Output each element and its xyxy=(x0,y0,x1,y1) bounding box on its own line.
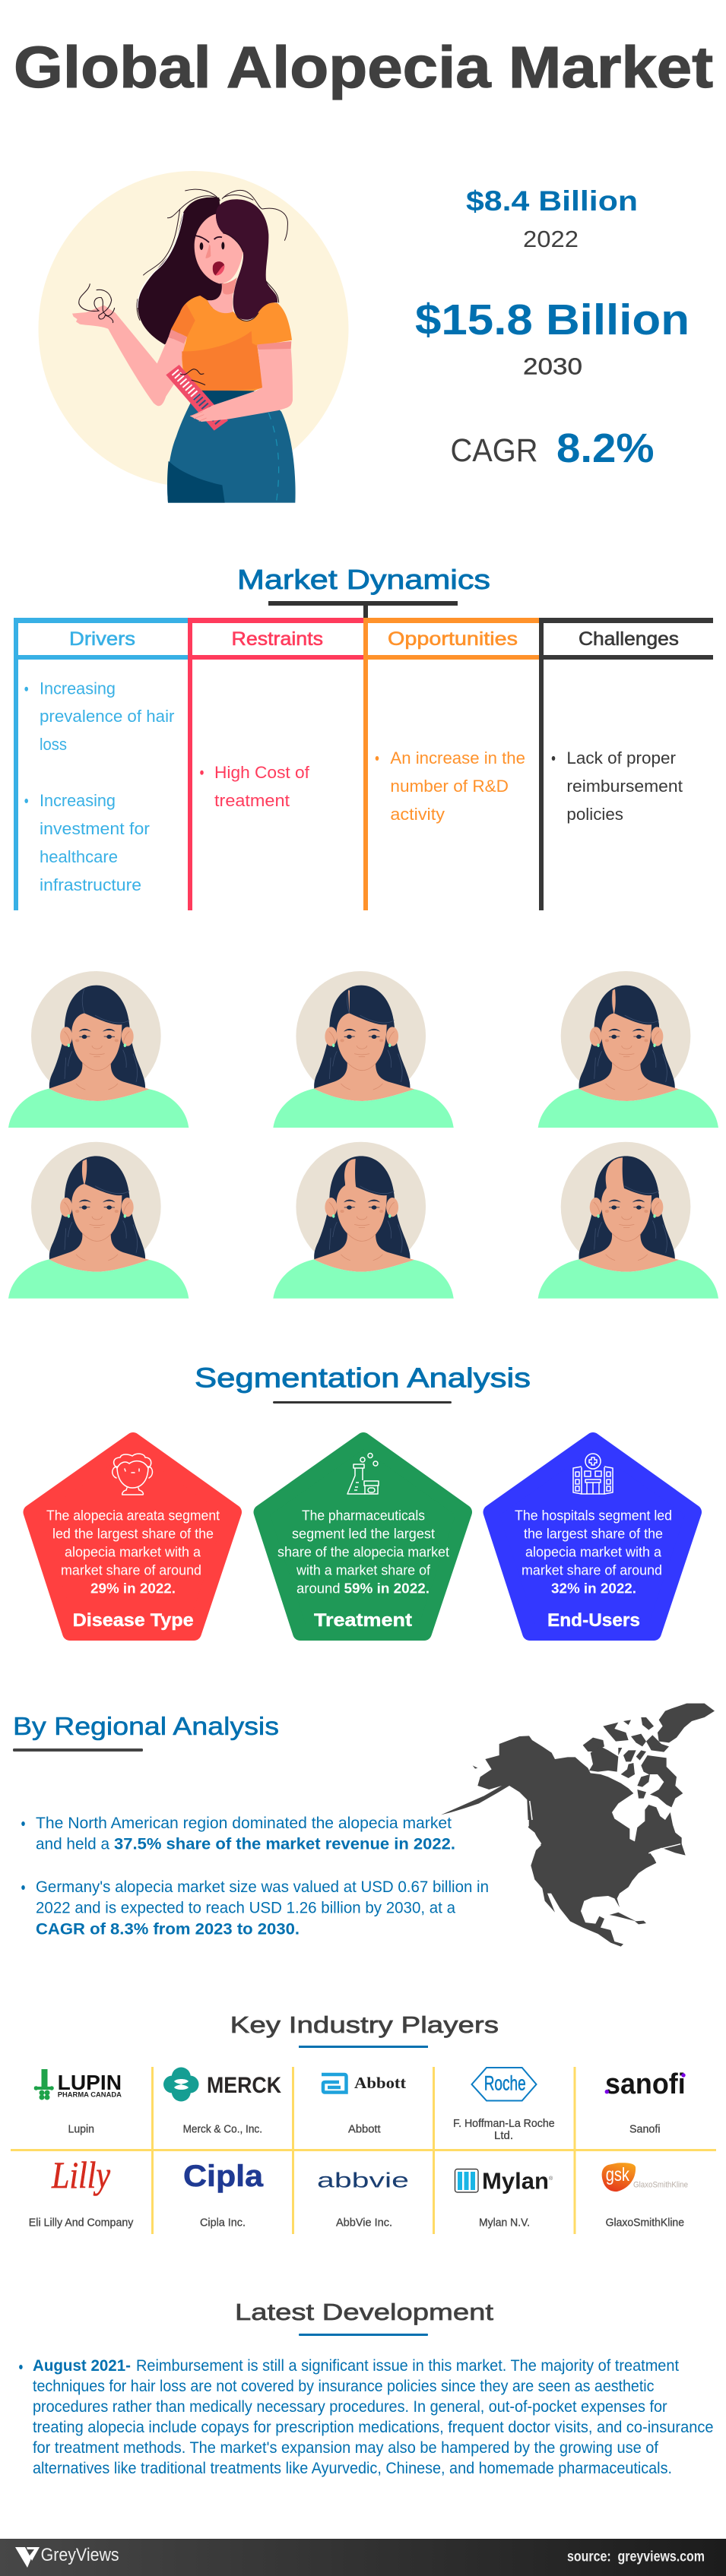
logo: abbott: Abbott xyxy=(354,2074,406,2092)
panel: challenges: Challenges xyxy=(579,628,679,650)
label: abbott: Abbott xyxy=(348,2124,381,2136)
description xyxy=(277,1508,449,1597)
label: roche xyxy=(453,2118,555,2142)
label: mylan: Mylan N.V. xyxy=(479,2217,530,2229)
heading: market dynamics: Market Dynamics xyxy=(237,564,490,595)
text block: latest development: techniques for hair loss are not covered by insurance policies since they are seen as aesthetic xyxy=(33,2378,654,2395)
description: led the largest share of the xyxy=(52,1526,214,1542)
background oval xyxy=(38,171,348,487)
heading: market dynamics xyxy=(237,564,490,619)
text block: north america share: and held a xyxy=(36,1834,109,1853)
icon: greyviews logo xyxy=(15,2547,40,2568)
description: The pharmaceuticals xyxy=(302,1508,425,1524)
text block: latest development: procedures rather than medically necessary procedures. In general, out-of-pocket expenses for xyxy=(33,2398,667,2416)
market size 2030 xyxy=(415,296,690,380)
logo: roche xyxy=(471,2068,537,2100)
description: market share of around xyxy=(522,1562,662,1578)
text block: north america share: 37.5% share of the market revenue in 2022. xyxy=(114,1834,455,1853)
description: 29% in 2022. xyxy=(90,1581,176,1597)
text block: north america share: The North American region dominated the alopecia market xyxy=(36,1814,452,1832)
label: cipla: Cipla Inc. xyxy=(200,2217,246,2229)
logo: mylan: ® xyxy=(549,2176,553,2182)
description xyxy=(46,1508,220,1597)
logo: merck: MERCK xyxy=(207,2073,281,2098)
logo: sanofi: sanofi xyxy=(605,2068,686,2100)
logo: lupin xyxy=(34,2069,122,2100)
text block: germany market: Germany's alopecia market size was valued at USD 0.67 billion in xyxy=(36,1878,489,1896)
description: around xyxy=(296,1581,341,1597)
panel: end-users xyxy=(491,1440,694,1633)
map: north america xyxy=(441,1704,715,1947)
market size 2030: 2030 xyxy=(523,353,582,380)
woman figure xyxy=(72,189,296,503)
market size 2030: $15.8 Billion xyxy=(415,296,690,344)
logo: abbott xyxy=(322,2074,406,2093)
market size 2022: 2022 xyxy=(523,226,579,252)
driver: healthcare investment: healthcare xyxy=(40,847,118,866)
icon: hospital xyxy=(573,1454,613,1494)
logo: lupin: PHARMA CANADA xyxy=(58,2090,122,2099)
label: lilly: Eli Lilly And Company xyxy=(29,2217,134,2229)
heading: segmentation analysis xyxy=(195,1362,531,1404)
panel: treatment xyxy=(262,1440,464,1633)
text block: germany market: 2022 and is expected to reach USD 1.26 billion by 2030, at a xyxy=(36,1899,455,1917)
description xyxy=(515,1508,672,1597)
text block: north america share xyxy=(21,1814,455,1853)
challenge item: policies xyxy=(566,805,623,824)
description: alopecia market with a xyxy=(525,1544,662,1560)
source: source: greyviews.com xyxy=(567,2549,705,2565)
pentagon xyxy=(491,1440,694,1633)
logo: gsk: GlaxoSmithKline xyxy=(633,2180,688,2189)
label: merck: Merck & Co., Inc. xyxy=(183,2124,262,2136)
illustration: hair loss stage 6 xyxy=(538,1142,718,1299)
brand name: GreyViews xyxy=(41,2545,119,2565)
pentagon xyxy=(30,1440,234,1633)
logo: roche: Roche xyxy=(484,2072,526,2095)
player grid lines xyxy=(11,2067,716,2234)
hair strands xyxy=(137,189,287,321)
label: sanofi: Sanofi xyxy=(629,2124,660,2136)
driver: healthcare investment: investment for xyxy=(40,819,150,838)
challenge item: Lack of proper xyxy=(566,748,676,767)
text block: latest development: August 2021- xyxy=(33,2357,131,2375)
description: 32% in 2022. xyxy=(551,1581,636,1597)
illustration: hair loss stage 5 xyxy=(273,1142,454,1299)
opportunity item xyxy=(376,748,525,824)
heading: latest development xyxy=(235,2299,493,2336)
label: Treatment xyxy=(314,1610,412,1631)
CAGR xyxy=(450,426,654,471)
face details xyxy=(200,242,203,250)
heading: latest development: Latest Development xyxy=(235,2299,493,2325)
pentagon xyxy=(262,1440,464,1633)
driver: hair loss: Increasing xyxy=(40,679,116,698)
text block: germany market: CAGR of 8.3% from 2023 to 2030. xyxy=(36,1919,300,1938)
logo: gsk xyxy=(602,2163,688,2191)
driver: healthcare investment xyxy=(24,791,150,894)
description: The hospitals segment led xyxy=(515,1508,672,1524)
icon: head with thinning hair xyxy=(113,1454,152,1495)
label: gsk: GlaxoSmithKline xyxy=(606,2217,684,2229)
logo: lilly: Lilly xyxy=(51,2154,111,2196)
text block: latest development: alternatives like traditional treatments like Ayurvedic, Chinese, and homemade pharmaceuticals. xyxy=(33,2460,672,2477)
logo: merck xyxy=(163,2067,281,2102)
heading: regional analysis: By Regional Analysis xyxy=(13,1712,279,1740)
label: roche: Ltd. xyxy=(494,2130,513,2142)
hero illustration: woman losing hair xyxy=(38,171,348,503)
restraint item: High Cost of xyxy=(214,763,310,782)
opportunity item: activity xyxy=(390,805,445,824)
text block: latest development xyxy=(19,2357,714,2477)
description: the largest share of the xyxy=(524,1526,663,1542)
driver: healthcare investment: infrastructure xyxy=(40,875,141,894)
description: share of the alopecia market xyxy=(277,1544,449,1560)
text block: latest development: treating alopecia include copays for prescription medications, frequent doctor visits, and co-insurance xyxy=(33,2419,713,2436)
panel: disease type xyxy=(30,1440,234,1633)
heading: key industry players xyxy=(230,2011,499,2048)
logo: mylan: Mylan xyxy=(482,2168,549,2195)
text block: latest development: Reimbursement is still a significant issue in this market. The majority of treatment xyxy=(136,2357,679,2375)
panel: opportunities: Opportunities xyxy=(388,628,518,650)
driver: healthcare investment: Increasing xyxy=(40,791,116,810)
title: Global Alopecia Market xyxy=(14,35,713,100)
driver: hair loss: loss xyxy=(40,735,67,754)
panel: restraints xyxy=(188,618,364,910)
CAGR: CAGR xyxy=(450,432,538,469)
logo: lupin: LUPIN xyxy=(58,2071,122,2094)
panel: challenges xyxy=(539,618,713,910)
footer xyxy=(0,2539,726,2576)
opportunity item: number of R&D xyxy=(390,777,509,796)
logo: abbvie: abbvie xyxy=(317,2168,409,2191)
label: abbvie: AbbVie Inc. xyxy=(336,2217,392,2229)
heading: regional analysis xyxy=(13,1712,279,1752)
logo: cipla: Cipla xyxy=(183,2160,264,2193)
description: alopecia market with a xyxy=(65,1544,201,1560)
illustration: hair loss stage 3 xyxy=(538,971,718,1128)
label: End-Users xyxy=(547,1610,640,1631)
heading: key industry players: Key Industry Players xyxy=(230,2011,499,2038)
icon: flask and pill bottle xyxy=(347,1453,379,1494)
heading: segmentation analysis: Segmentation Analysis xyxy=(195,1362,531,1394)
illustration: hair loss stage 1 xyxy=(8,971,189,1128)
illustration: hair loss stage 2 xyxy=(273,971,454,1128)
label: roche: F. Hoffman-La Roche xyxy=(453,2118,555,2130)
restraint item xyxy=(200,763,310,810)
label: Disease Type xyxy=(73,1610,194,1631)
panel: drivers: Drivers xyxy=(69,628,135,650)
description: 59% in 2022. xyxy=(344,1581,430,1597)
label: lupin: Lupin xyxy=(68,2124,94,2136)
restraint item: treatment xyxy=(214,791,290,810)
market size 2022: $8.4 Billion xyxy=(466,185,638,217)
description: The alopecia areata segment xyxy=(46,1508,220,1524)
panel: opportunities xyxy=(363,618,539,910)
text block: latest development: for treatment methods. The market's expansion may also be hampered by the growing use of xyxy=(33,2439,658,2457)
text block: germany market xyxy=(21,1878,489,1938)
logo: gsk: gsk xyxy=(606,2164,629,2185)
logo: mylan xyxy=(455,2168,553,2195)
driver: hair loss xyxy=(24,679,175,754)
panel: restraints: Restraints xyxy=(231,628,323,650)
driver: hair loss: prevalence of hair xyxy=(40,707,175,726)
market size 2022 xyxy=(466,185,638,252)
panel: drivers xyxy=(14,618,188,910)
opportunity item: An increase in the xyxy=(390,748,525,767)
challenge item xyxy=(552,748,683,824)
CAGR: 8.2% xyxy=(556,426,654,471)
description: with a market share of xyxy=(296,1562,431,1578)
description: market share of around xyxy=(61,1562,201,1578)
challenge item: reimbursement xyxy=(566,777,683,796)
illustration: hair loss stage 4 xyxy=(8,1142,189,1299)
description: segment led the largest xyxy=(292,1526,435,1542)
